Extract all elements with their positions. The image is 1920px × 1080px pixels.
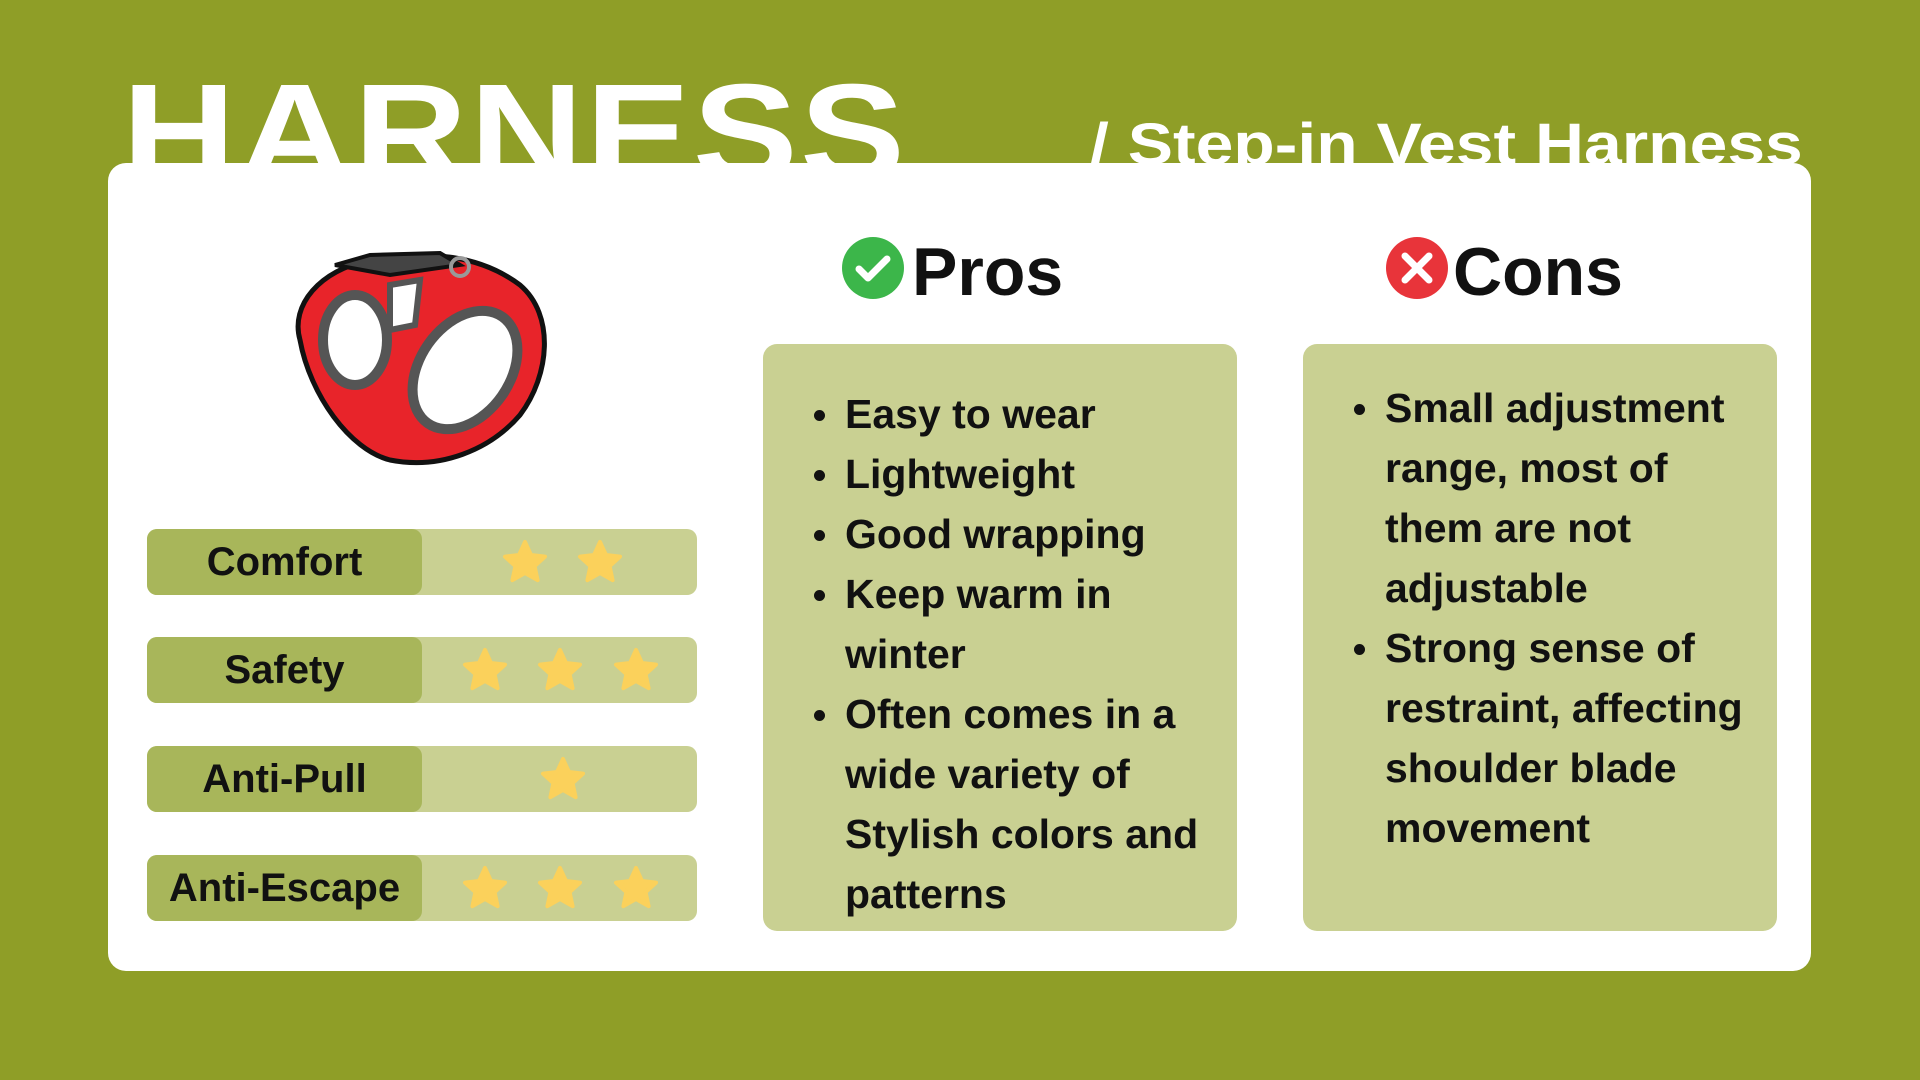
heading: pros: Pros xyxy=(912,234,1063,310)
rating: anti-escape: Anti-Escape xyxy=(169,866,400,910)
panel: pros list: Stylish colors and xyxy=(845,811,1198,857)
rating: anti-pull: Anti-Pull xyxy=(202,757,367,801)
panel: cons list: Small adjustment xyxy=(1385,385,1724,431)
panel: pros list: winter xyxy=(845,631,966,677)
rating: anti-escape xyxy=(147,855,697,921)
panel: pros list: Keep warm in xyxy=(845,571,1112,617)
rating: comfort: Comfort xyxy=(207,540,362,584)
panel: pros list: wide variety of xyxy=(845,751,1130,797)
panel: pros list: Lightweight xyxy=(845,451,1075,497)
panel: pros list xyxy=(763,344,1237,931)
rating: safety xyxy=(147,637,697,703)
panel: pros list: patterns xyxy=(845,871,1007,917)
panel: cons list xyxy=(1303,344,1777,931)
panel: pros list: Good wrapping xyxy=(845,511,1146,557)
panel: cons list: shoulder blade xyxy=(1385,745,1677,791)
rating: safety: Safety xyxy=(224,648,345,692)
heading: cons: Cons xyxy=(1453,234,1623,310)
panel: cons list: movement xyxy=(1385,805,1590,851)
rating: anti-pull xyxy=(147,746,697,812)
panel: cons list: range, most of xyxy=(1385,445,1667,491)
rating: comfort xyxy=(147,529,697,595)
panel: cons list: them are not xyxy=(1385,505,1631,551)
icon: cross xyxy=(1386,237,1448,299)
panel: main card xyxy=(108,163,1811,971)
icon: harness xyxy=(296,251,547,466)
icon: check xyxy=(842,237,904,299)
panel: pros list: Often comes in a xyxy=(845,691,1175,737)
title: HARNESS xyxy=(122,56,907,210)
subtitle: / Step-in Vest Harness xyxy=(1090,112,1803,177)
panel: cons list: adjustable xyxy=(1385,565,1588,611)
panel: cons list: restraint, affecting xyxy=(1385,685,1743,731)
panel: pros list: Easy to wear xyxy=(845,391,1096,437)
panel: cons list: Strong sense of xyxy=(1385,625,1695,671)
